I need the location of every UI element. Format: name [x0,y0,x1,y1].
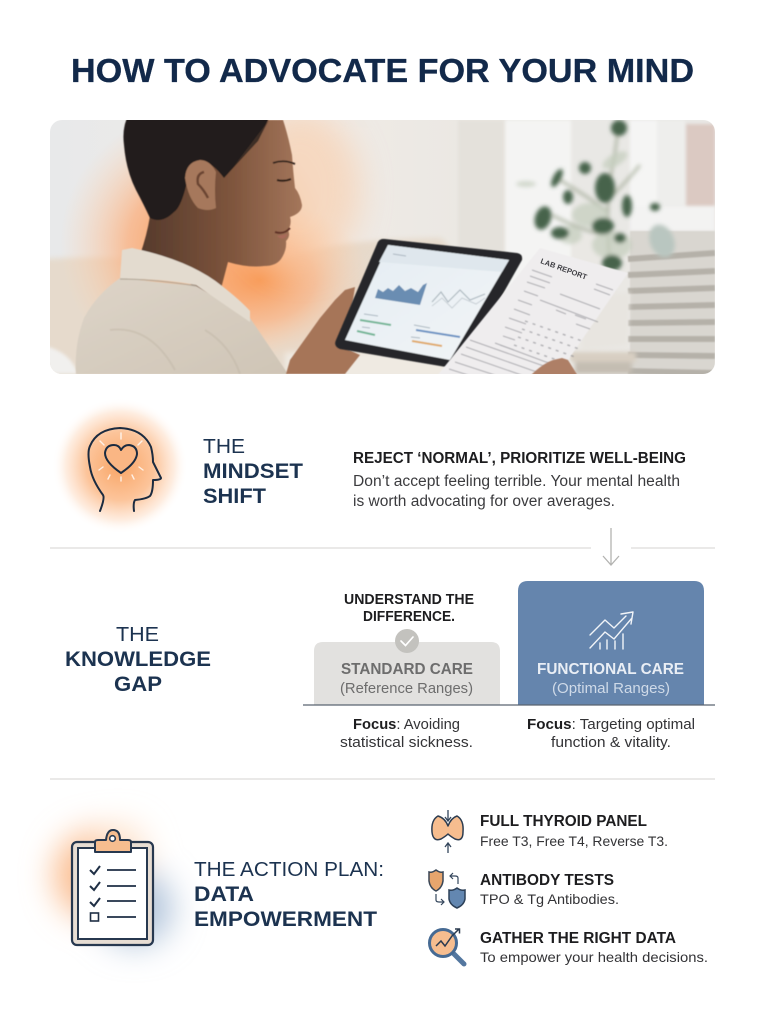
shirt [76,278,288,374]
text block: reject normal [353,450,686,510]
left hand [286,287,360,374]
icon: thyroid [432,810,463,853]
heading: understand the difference: DIFFERENCE. [363,609,455,625]
list item: antibody tests [429,870,619,908]
tablet [335,239,522,369]
pillar and window [458,120,715,374]
brow, eye, lips [273,161,295,164]
text block: functional focus [527,717,695,751]
list item: gather the right data: GATHER THE RIGHT DATA [480,930,676,947]
sofa [40,238,452,380]
icon: shields [429,870,465,908]
heading: the knowledge gap: THE [116,624,159,646]
text block: reject normal: Don’t accept feeling terrible. Your mental health [353,473,680,490]
panel: functional care: FUNCTIONAL CARE [537,661,684,678]
heading: the mindset shift: THE [203,436,245,458]
list item: full thyroid panel: Free T3, Free T4, Reverse T3. [480,833,668,849]
hair [123,118,269,220]
text block: functional focus: Focus: Targeting optimal [527,717,695,733]
heading: the action plan: EMPOWERMENT [194,908,377,931]
plant [516,120,679,374]
heading: the mindset shift [203,436,303,508]
orange glow [72,145,300,324]
heading: the knowledge gap [65,624,211,696]
photo: woman reviewing tablet and lab report [40,110,715,382]
list item: full thyroid panel [432,810,668,853]
icon: clipboard [54,825,173,946]
text block: standard focus: statistical sickness. [340,735,473,751]
heading: the knowledge gap: KNOWLEDGE [65,648,211,671]
icon: magnifier [430,929,464,964]
title: HOW TO ADVOCATE FOR YOUR MIND [71,52,694,89]
panel: standard care: STANDARD CARE [341,661,473,678]
panel: standard care: (Reference Ranges) [340,680,473,697]
panel: functional care [518,581,704,705]
lab report [439,258,628,374]
heading: understand the difference: UNDERSTAND THE [344,592,474,608]
list item: full thyroid panel: FULL THYROID PANEL [480,813,647,830]
icon: check badge [395,629,419,653]
heading: the action plan: DATA [194,883,254,906]
panel: standard care [314,629,500,705]
list item: antibody tests: TPO & Tg Antibodies. [480,891,619,907]
woman [76,118,302,374]
panel: functional care: (Optimal Ranges) [552,680,670,697]
icon: rising chart [590,612,633,649]
heading: the mindset shift: SHIFT [203,485,266,508]
lab report: LAB REPORT [539,256,589,282]
neck and face [140,120,302,300]
heading: the action plan: THE ACTION PLAN: [194,859,384,881]
arrow: down [603,528,619,565]
right hand [530,358,578,376]
text block: standard focus [340,717,473,751]
heading: understand the difference [344,592,474,625]
list item: antibody tests: ANTIBODY TESTS [480,872,614,889]
icon: head with heart [52,398,188,534]
text block: standard focus: Focus: Avoiding [353,717,460,733]
list item: gather the right data: To empower your health decisions. [480,949,708,965]
heading: the mindset shift: MINDSET [203,460,303,483]
radiator [628,231,715,374]
text block: reject normal: is worth advocating for over averages. [353,493,615,510]
ear [185,160,216,210]
text block: reject normal: REJECT ‘NORMAL’, PRIORITIZE WELL-BEING [353,450,686,467]
heading: the knowledge gap: GAP [114,673,162,696]
list item: gather the right data [430,929,708,965]
text block: functional focus: function & vitality. [551,735,671,751]
heading: the action plan [194,859,384,931]
